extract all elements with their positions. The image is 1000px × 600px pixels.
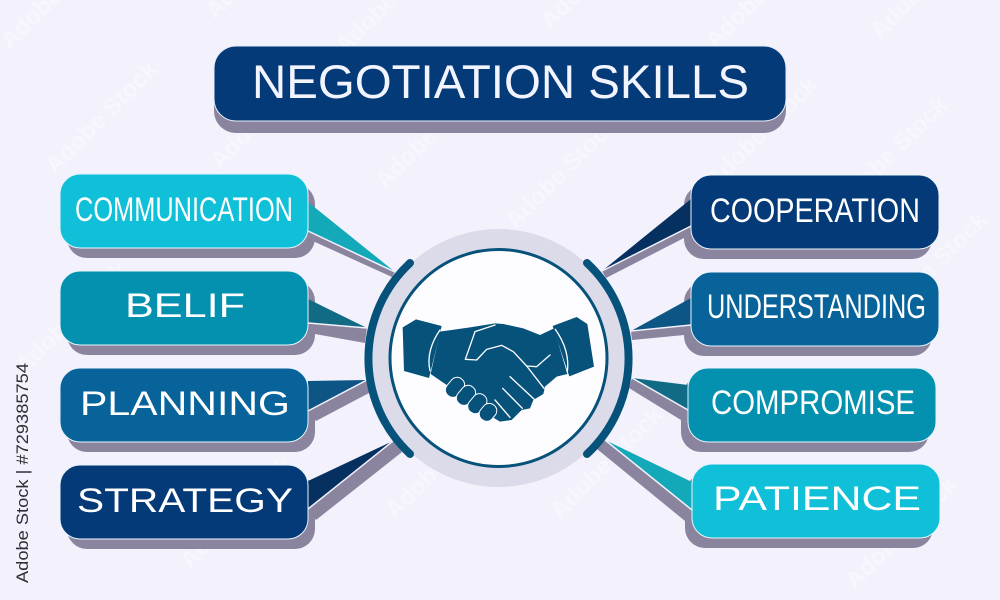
connector: patience — [605, 440, 692, 510]
panel: understanding — [691, 272, 939, 346]
connector: cooperation — [602, 199, 691, 271]
text: Adobe Stock — [700, 71, 823, 194]
connector: planning — [308, 380, 367, 411]
text: Adobe Stock — [175, 451, 298, 574]
panel: patience: PATIENCE — [713, 480, 921, 518]
title banner — [214, 46, 786, 133]
text: Adobe Stock — [830, 91, 953, 214]
connector: compromise — [632, 378, 688, 410]
text: Adobe Stock — [500, 111, 623, 234]
box and connector shadows — [67, 184, 933, 549]
text: Adobe Stock — [40, 56, 163, 179]
panel: patience — [692, 464, 940, 538]
panel: communication: COMMUNICATION — [75, 191, 293, 229]
text: Adobe Stock — [10, 256, 133, 379]
connector: communication — [308, 202, 395, 272]
connector: belif — [308, 299, 367, 328]
panel: planning: PLANNING — [80, 385, 290, 423]
panel: compromise: COMPROMISE — [711, 384, 915, 422]
title text: NEGOTIATION SKILLS — [252, 55, 749, 108]
panel: planning — [60, 368, 308, 442]
text: Adobe Stock — [205, 51, 328, 174]
panel: strategy: STRATEGY — [77, 482, 293, 520]
panel: belif: BELIF — [125, 287, 245, 325]
text: Adobe Stock — [380, 401, 503, 524]
panel: understanding: UNDERSTANDING — [707, 288, 926, 326]
connector: understanding — [631, 298, 691, 331]
text: Adobe Stock — [370, 71, 493, 194]
stock id text: Adobe Stock | #729385754 — [13, 363, 32, 583]
panel: cooperation — [691, 175, 939, 249]
text: Adobe Stock — [840, 471, 963, 594]
panel: strategy — [60, 465, 308, 539]
text: Adobe Stock — [545, 401, 668, 524]
panel: cooperation: COOPERATION — [710, 192, 920, 230]
panel: communication — [60, 174, 308, 248]
central circle — [368, 229, 629, 487]
panel: compromise — [688, 368, 936, 442]
text: Adobe Stock — [870, 206, 993, 329]
connector: strategy — [308, 441, 393, 509]
panel: belif — [60, 271, 308, 345]
icon: handshake — [403, 317, 594, 424]
